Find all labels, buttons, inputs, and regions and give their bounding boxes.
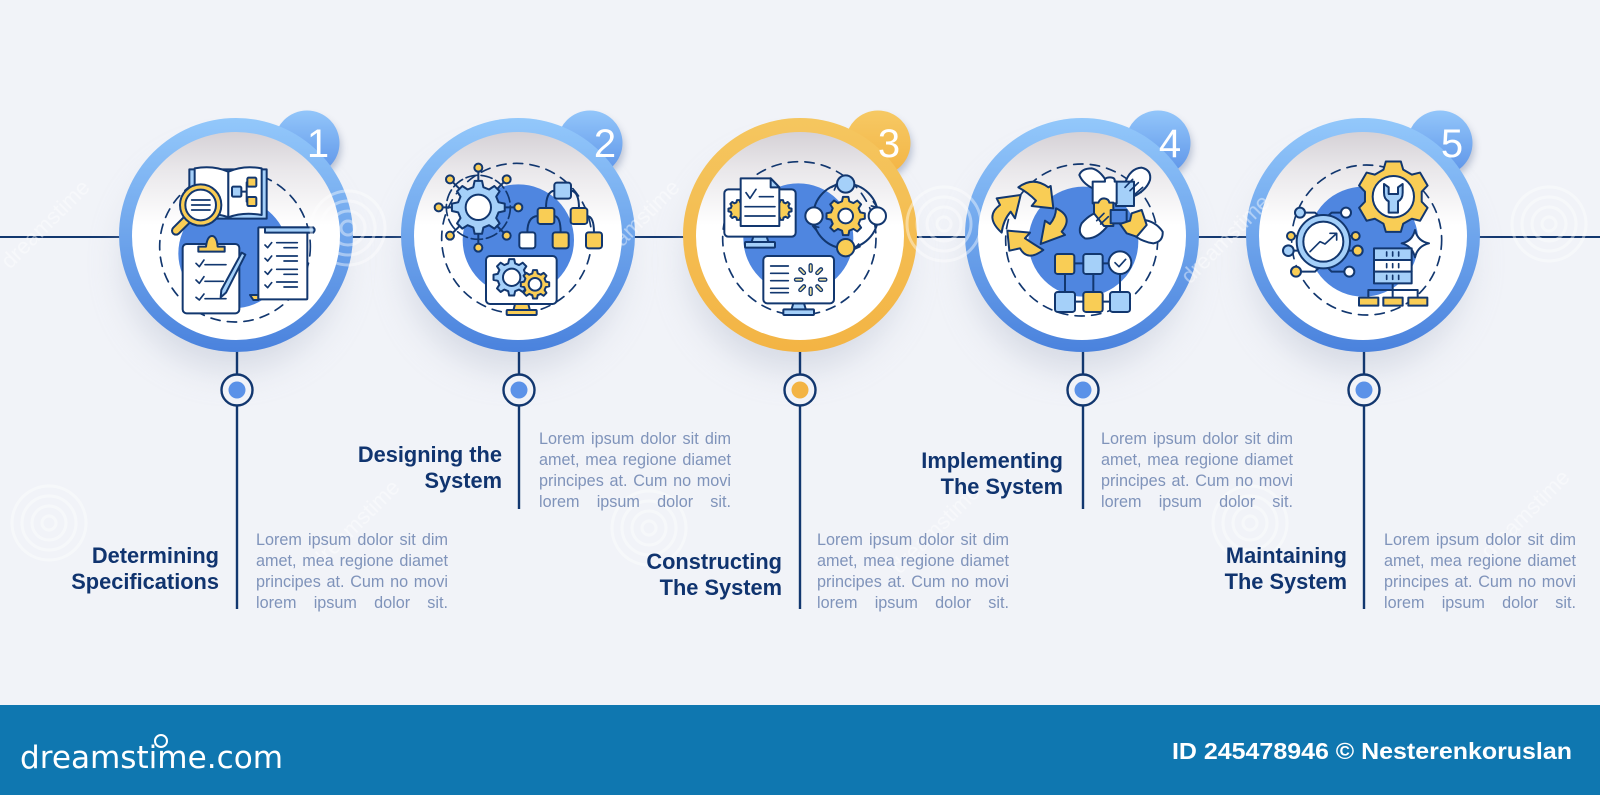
step 1 text <box>256 531 448 612</box>
icon: system design <box>435 163 602 315</box>
number 5: 5 <box>1441 122 1463 166</box>
step 2 title: Designing the <box>358 442 502 467</box>
step 3 circle <box>683 110 917 609</box>
timeline axis <box>0 236 1600 238</box>
watermark text: dreamstime <box>886 480 985 579</box>
icon: construction <box>723 162 886 315</box>
step 2 title: System <box>424 468 502 493</box>
number 2: 2 <box>594 122 616 166</box>
footer logo: dreamstime.com <box>20 740 283 776</box>
step 5 text <box>1384 531 1576 612</box>
step 5 title <box>1224 543 1347 594</box>
icon: maintenance <box>1283 161 1442 315</box>
step 1 text: Lorem ipsum dolor sit dim <box>256 531 448 549</box>
footer band <box>0 705 1600 795</box>
step 3 title <box>646 549 782 600</box>
step 3 title: Constructing <box>646 549 782 574</box>
step 4 text: Lorem ipsum dolor sit dim <box>1101 430 1293 448</box>
watermark spirals <box>12 187 1586 565</box>
step 1 text: principes at. Cum no movi <box>256 573 448 591</box>
step 3 text <box>817 531 1009 612</box>
step 1 circle <box>119 110 353 609</box>
step 2 text <box>539 430 731 511</box>
icon: implementation <box>992 164 1163 316</box>
step 2 text: amet, mea regione diamet <box>539 451 731 469</box>
step 1 title: Determining <box>92 543 219 568</box>
step 1 text: amet, mea regione diamet <box>256 552 448 570</box>
step 5 text: lorem ipsum dolor sit. <box>1384 594 1576 612</box>
step 4 text <box>1101 430 1293 511</box>
watermark text <box>0 175 1575 579</box>
watermark text: dreamstime <box>1176 190 1275 289</box>
step 2 text: principes at. Cum no movi <box>539 472 731 490</box>
step 3 text: lorem ipsum dolor sit. <box>817 594 1009 612</box>
watermark text: dreamstime <box>586 175 685 274</box>
number 3: 3 <box>878 122 900 166</box>
step 4 text: principes at. Cum no movi <box>1101 472 1293 490</box>
step 2 text: Lorem ipsum dolor sit dim <box>539 430 731 448</box>
step 3 text: principes at. Cum no movi <box>817 573 1009 591</box>
step 3 text: Lorem ipsum dolor sit dim <box>817 531 1009 549</box>
step 5 circle <box>1246 110 1480 609</box>
step 5 title: The System <box>1225 569 1347 594</box>
footer credit: ID 245478946 © Nesterenkoruslan <box>1172 738 1572 764</box>
step 4 title: The System <box>941 474 1063 499</box>
watermark text: dreamstime <box>306 475 405 574</box>
number 4: 4 <box>1159 122 1181 166</box>
step 5 title: Maintaining <box>1226 543 1347 568</box>
step 4 text: lorem ipsum dolor sit. <box>1101 493 1293 511</box>
step 2 title <box>358 442 502 493</box>
number 1: 1 <box>307 122 329 166</box>
step 1 title: Specifications <box>71 569 219 594</box>
step 2 circle <box>401 110 635 509</box>
step 1 title <box>71 543 219 594</box>
step 5 text: Lorem ipsum dolor sit dim <box>1384 531 1576 549</box>
step 3 text: amet, mea regione diamet <box>817 552 1009 570</box>
step 4 title: Implementing <box>921 448 1063 473</box>
step 4 text: amet, mea regione diamet <box>1101 451 1293 469</box>
step 2 text: lorem ipsum dolor sit. <box>539 493 731 511</box>
step 1 text: lorem ipsum dolor sit. <box>256 594 448 612</box>
step 5 text: amet, mea regione diamet <box>1384 552 1576 570</box>
step 5 text: principes at. Cum no movi <box>1384 573 1576 591</box>
watermark text: dreamstime <box>1476 465 1575 564</box>
step 3 title: The System <box>660 575 782 600</box>
icon: specifications <box>160 167 315 322</box>
step 4 circle <box>965 110 1199 509</box>
step 4 title <box>921 448 1063 499</box>
